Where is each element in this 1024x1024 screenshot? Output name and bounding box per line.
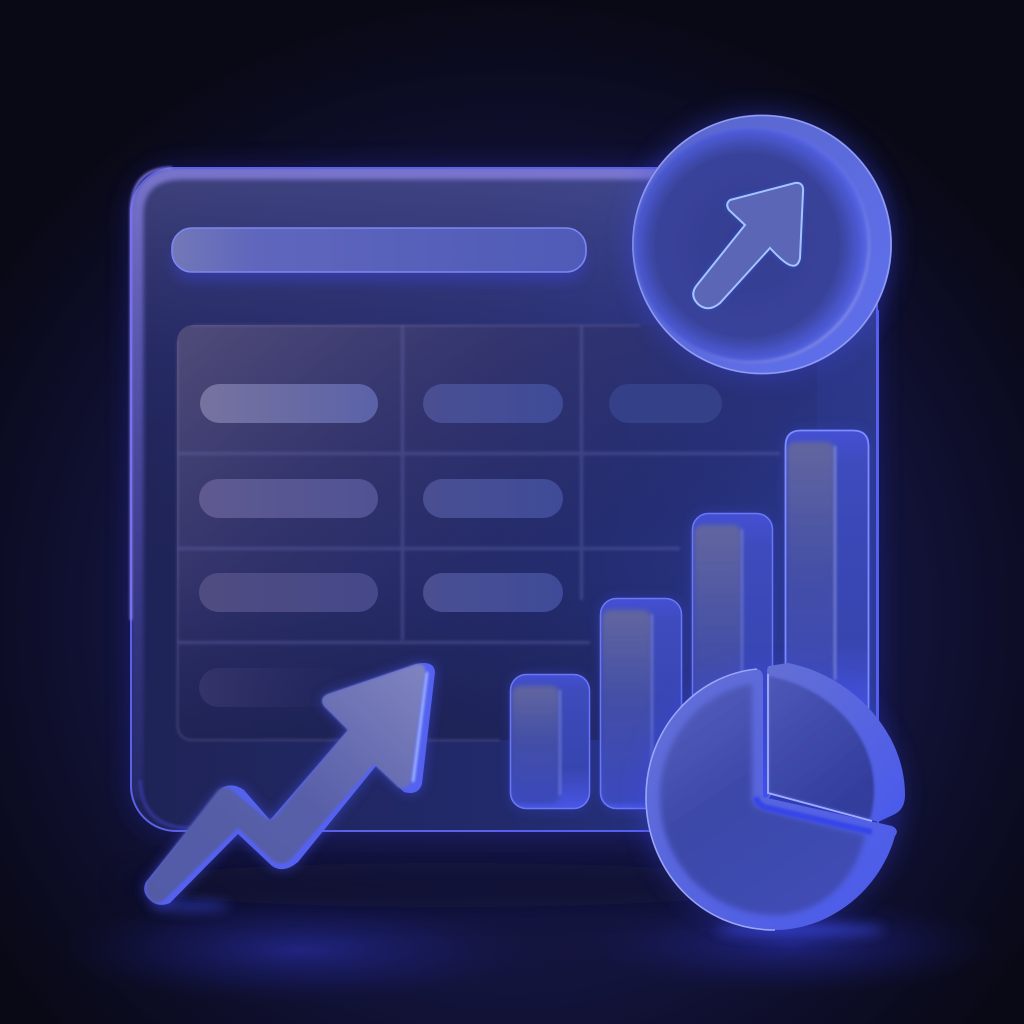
table row 1: [200, 384, 722, 423]
bar 1: [510, 674, 590, 809]
table row 2: [199, 479, 563, 518]
floor glow: [60, 863, 1000, 1005]
table row 4: [199, 668, 349, 707]
heading bar: [172, 228, 586, 282]
bar 3: [692, 513, 773, 803]
arrow side depth: [144, 663, 435, 905]
bar 2: [600, 598, 682, 809]
pie chart: [644, 663, 905, 930]
pie small slice: [767, 663, 905, 822]
data table: [177, 325, 817, 740]
icon: circular badge with arrow: [631, 113, 893, 375]
bar 4: [785, 430, 869, 730]
bar chart: [510, 430, 869, 809]
icon: rising zigzag arrow: [144, 663, 435, 905]
icon: badge arrow: [693, 183, 803, 308]
panel: dashboard glass card: [130, 167, 878, 832]
pie main slice: [646, 669, 897, 930]
table row 3: [199, 573, 563, 612]
arrow face: [146, 664, 425, 903]
